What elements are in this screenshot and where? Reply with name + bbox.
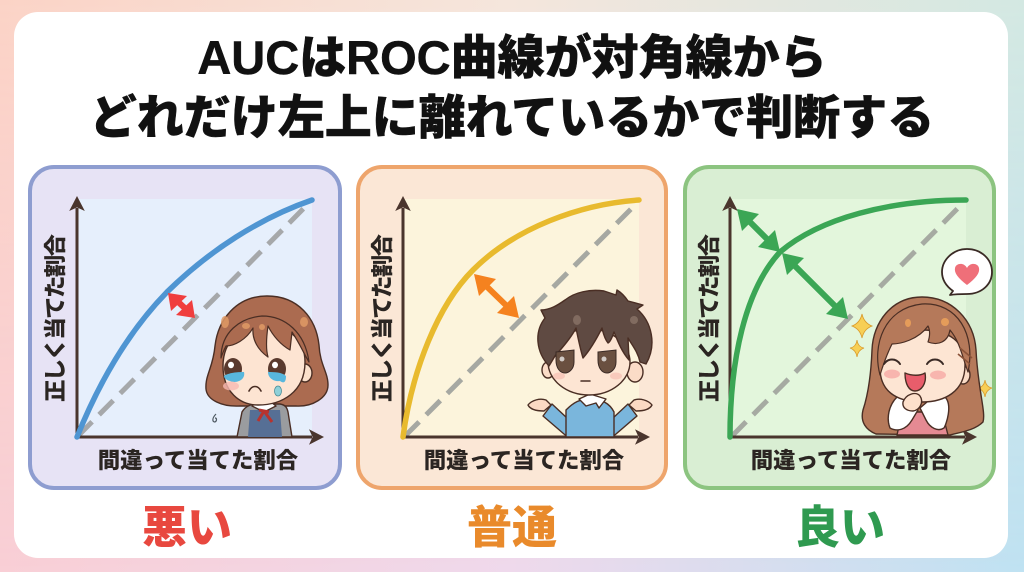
- panel: good: [685, 167, 994, 488]
- diagonal: normal: [405, 204, 636, 436]
- arrow: distance to diagonal: [782, 253, 848, 319]
- ROC curve: good: [730, 200, 966, 437]
- y label: normal: 正しく当てた割合: [370, 233, 395, 402]
- plot area: good: [731, 199, 966, 437]
- ROC curve: bad: [77, 200, 312, 437]
- verdict: bad: 悪い: [142, 502, 232, 553]
- diagonal: bad: [78, 204, 308, 436]
- y label: good: 正しく当てた割合: [697, 233, 722, 402]
- title: [90, 31, 934, 144]
- panel: normal: [358, 167, 666, 488]
- diagonal: good: [732, 204, 962, 436]
- verdict: good: 良い: [795, 502, 885, 553]
- axes: bad: [77, 208, 312, 437]
- x label: normal: 間違って当てた割合: [424, 448, 625, 473]
- x label: good: 間違って当てた割合: [751, 448, 952, 473]
- icon: sparkles: [850, 314, 992, 397]
- panel: bad: [30, 167, 340, 488]
- arrow: normal distance: [474, 274, 519, 318]
- x label: bad: 間違って当てた割合: [98, 448, 299, 473]
- title: どれだけ左上に離れているかで判断する: [90, 91, 934, 144]
- ROC curve: normal: [403, 200, 639, 437]
- axes: normal: [403, 208, 638, 437]
- axes: good: [730, 208, 965, 437]
- plot area: normal: [404, 199, 639, 437]
- arrow: distance to top-left: [737, 209, 780, 252]
- icon: heart speech bubble: [942, 249, 992, 295]
- character: shrugging boy: [528, 290, 652, 437]
- verdict: normal: 普通: [467, 502, 557, 553]
- character: happy girl: [862, 297, 984, 435]
- title: AUCはROC曲線が対角線から: [197, 31, 827, 84]
- plot area: bad: [77, 199, 312, 437]
- y label: bad: 正しく当てた割合: [43, 233, 68, 402]
- character: crying girl: [206, 296, 328, 437]
- arrow: bad distance: [168, 293, 195, 318]
